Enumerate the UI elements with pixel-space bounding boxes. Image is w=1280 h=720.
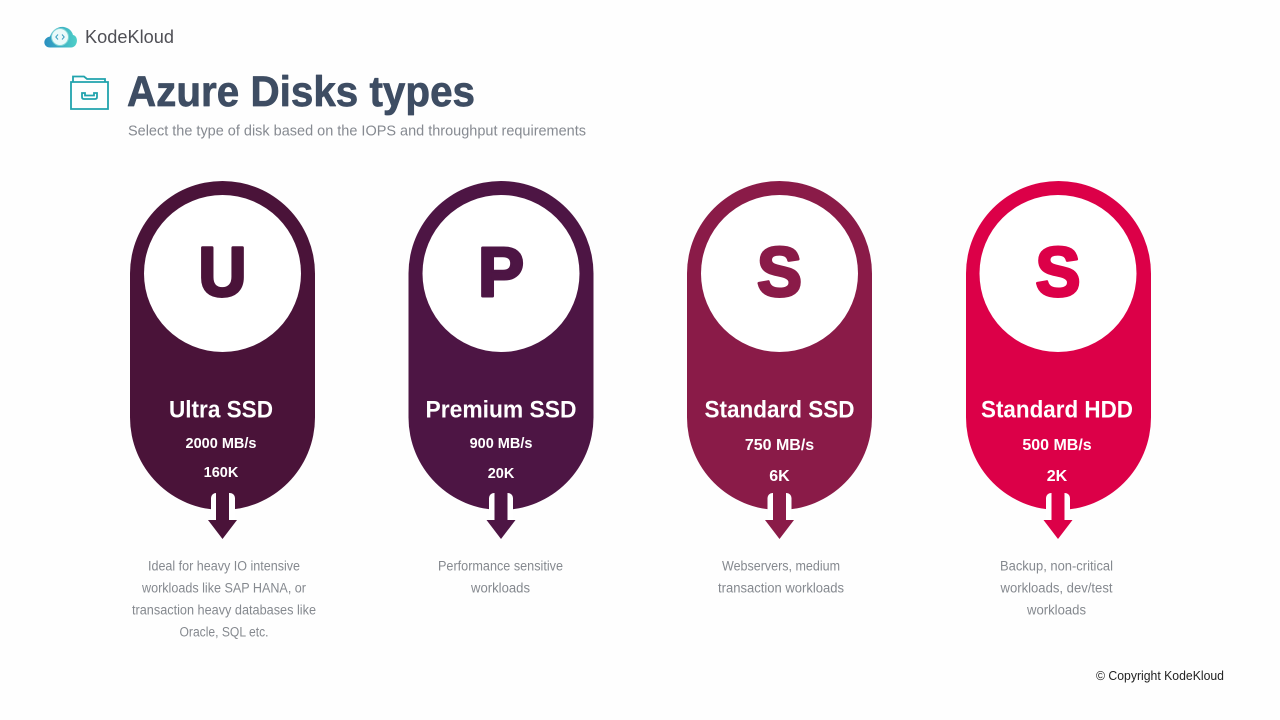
description: Webservers, medium	[722, 558, 840, 574]
description: workloads, dev/test	[1000, 580, 1113, 596]
letter badge	[144, 195, 301, 352]
IOPS: 2K	[1047, 468, 1068, 485]
panel: Ultra SSD	[130, 181, 316, 640]
description	[132, 558, 316, 640]
letter badge	[701, 195, 858, 352]
throughput: 750 MB/s	[745, 437, 814, 454]
description: Backup, non-critical	[1000, 558, 1113, 574]
pill background	[408, 181, 594, 510]
disk name: Standard SSD	[704, 396, 854, 424]
description: transaction workloads	[718, 580, 844, 596]
letter badge: S	[757, 233, 802, 311]
disk name: Ultra SSD	[169, 396, 273, 424]
arrow	[208, 493, 237, 539]
disk name: Premium SSD	[426, 396, 576, 424]
letter badge: U	[198, 233, 246, 311]
panel: Premium SSD	[408, 181, 594, 596]
throughput: 500 MB/s	[1022, 437, 1092, 454]
description: workloads	[1026, 602, 1086, 618]
description: workloads like SAP HANA, or	[141, 580, 306, 596]
description: workloads	[470, 580, 530, 596]
logo wordmark: KodeKloud	[85, 26, 174, 47]
pill background	[687, 181, 872, 510]
IOPS: 160K	[204, 465, 239, 481]
description	[438, 558, 563, 596]
description: Performance sensitive	[438, 558, 563, 574]
description	[718, 558, 844, 596]
copyright: © Copyright KodeKloud	[1096, 668, 1224, 683]
letter badge: S	[1036, 233, 1080, 311]
arrow	[486, 493, 516, 539]
disk name: Standard HDD	[981, 396, 1133, 424]
description	[1000, 558, 1113, 618]
panel: Standard SSD	[687, 181, 872, 596]
description: transaction heavy databases like	[132, 602, 316, 618]
letter badge: P	[478, 233, 524, 311]
letter badge	[422, 195, 580, 352]
arrow	[765, 493, 794, 539]
logo: KodeKloud	[44, 26, 174, 48]
pill background	[130, 181, 315, 510]
throughput: 2000 MB/s	[186, 436, 256, 452]
icon: cloud	[44, 27, 77, 48]
icon: folder drawer	[71, 76, 108, 109]
letter badge	[980, 195, 1136, 352]
IOPS: 6K	[769, 468, 790, 485]
title: Azure Disks types	[127, 68, 475, 116]
arrow	[1044, 493, 1072, 539]
IOPS: 20K	[488, 466, 515, 482]
pill background	[966, 181, 1151, 510]
throughput: 900 MB/s	[470, 436, 532, 452]
panel: Standard HDD	[966, 181, 1151, 618]
description: Ideal for heavy IO intensive	[148, 558, 300, 574]
description: Oracle, SQL etc.	[180, 624, 268, 640]
subtitle: Select the type of disk based on the IOPS and throughput requirements	[128, 124, 586, 140]
